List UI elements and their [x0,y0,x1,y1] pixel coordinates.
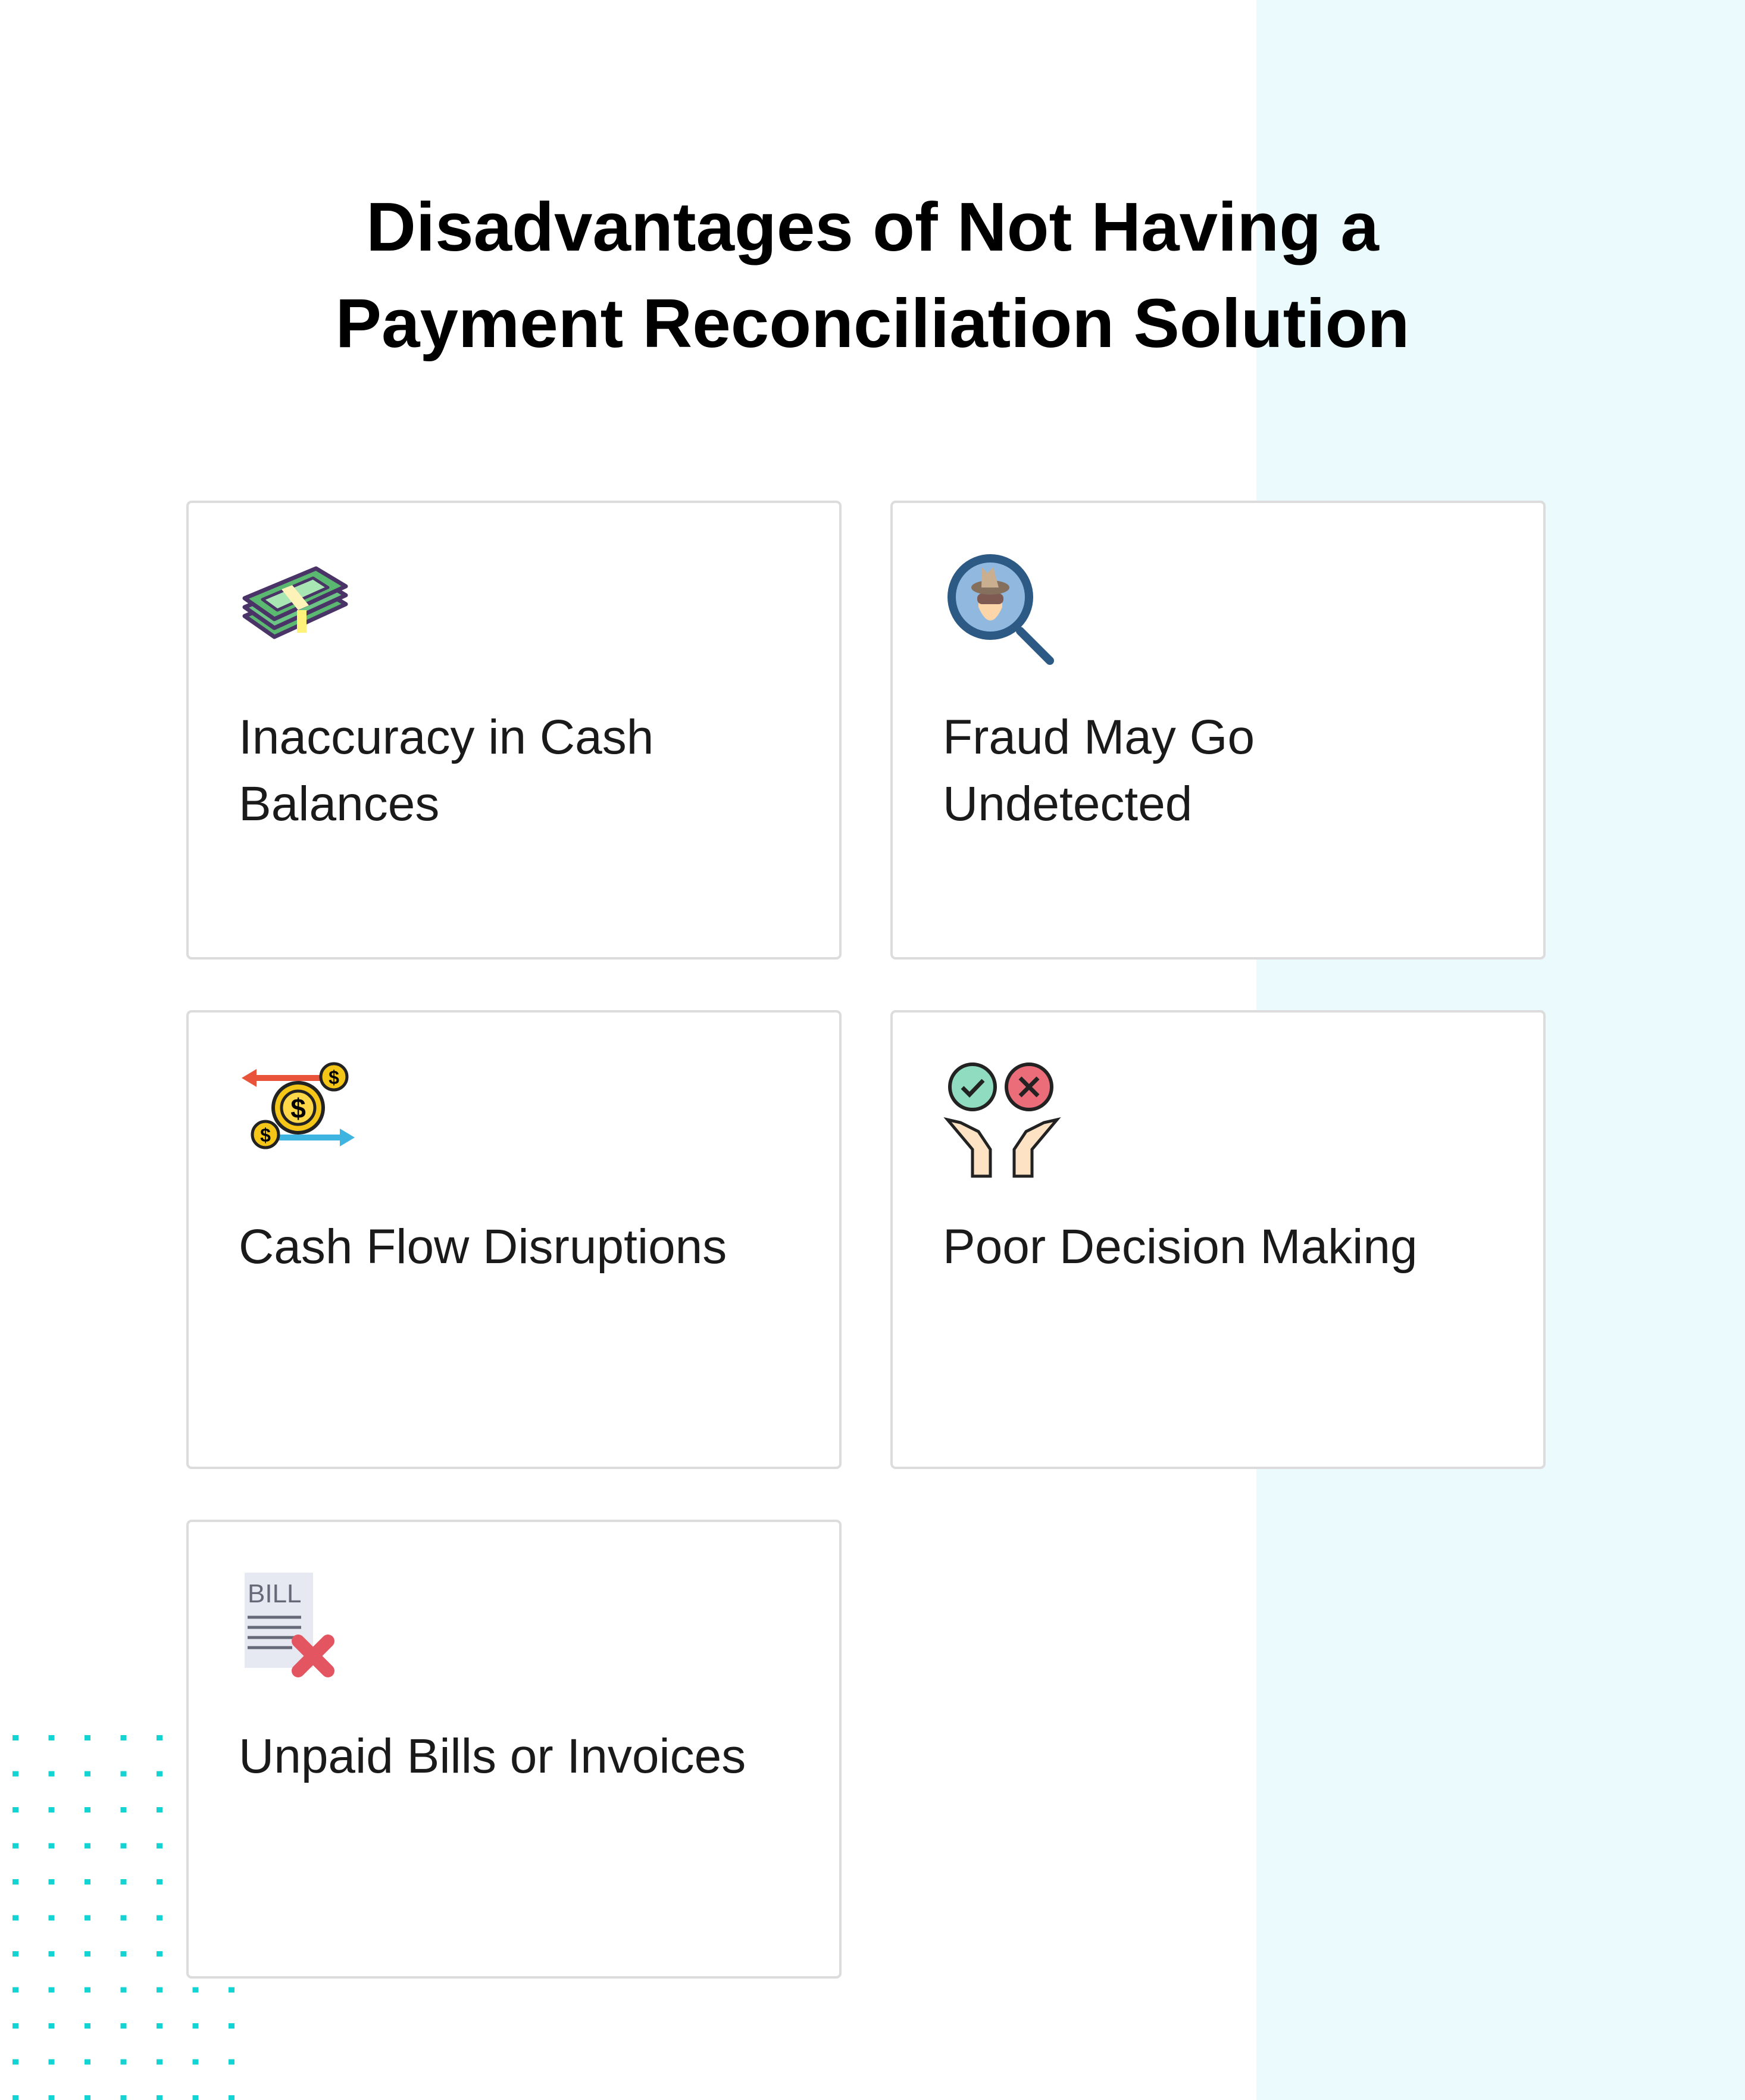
panel: fraud [890,501,1546,960]
panel: cash flow disruptions [186,1010,842,1469]
icon: coins with arrows [242,1062,355,1149]
text: Cash Flow Disruptions [239,1220,727,1274]
title: Disadvantages of Not Having a [366,188,1379,265]
icon: stack of cash [243,567,348,639]
panel: poor decision making [890,1010,1546,1469]
icon: bill with red cross [245,1573,334,1677]
panel: inaccuracy in cash balances [186,501,842,960]
text: Poor Decision Making [943,1220,1418,1274]
title [336,188,1409,362]
text: Inaccuracy in Cash [239,710,653,764]
icon: magnifier with detective [947,554,1054,665]
icon: coins with arrows: $ [329,1067,339,1088]
icon: hands with check and cross [943,1062,1061,1177]
text [943,710,1255,831]
text: Undetected [943,777,1192,831]
text: Balances [239,777,439,831]
icon: bill with red cross: BILL [248,1579,302,1608]
text: Fraud May Go [943,710,1255,764]
decorative dot grid [12,1735,234,2100]
title: Payment Reconciliation Solution [336,285,1409,362]
text [239,710,653,831]
panel: unpaid bills [186,1520,842,1979]
icon: coins with arrows: $ [260,1124,271,1146]
icon: coins with arrows: $ [290,1093,306,1124]
text: Unpaid Bills or Invoices [239,1729,746,1783]
